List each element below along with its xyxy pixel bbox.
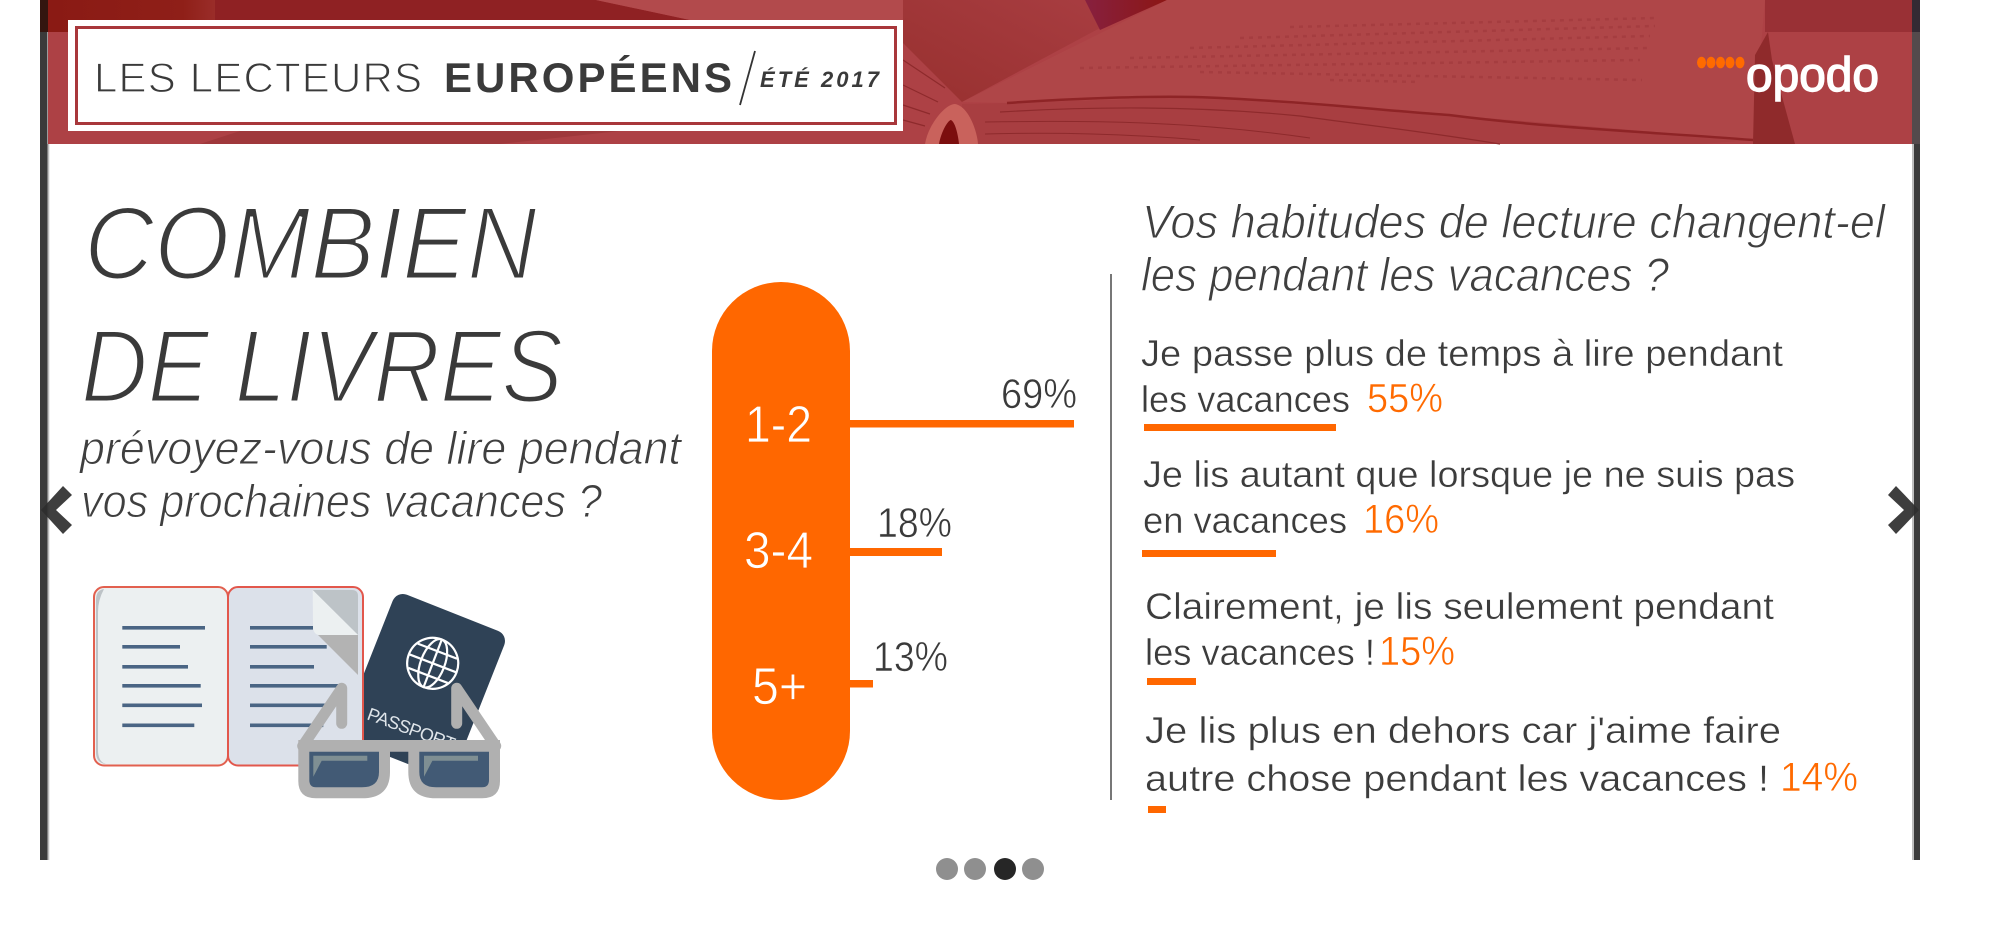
heading: reading habits question: Vos habitudes de lecture changent-el (1142, 195, 1886, 248)
answer: 14% (1145, 710, 1858, 813)
answer: 15%: les vacances ! (1145, 632, 1375, 673)
title box (68, 20, 903, 131)
logo: opodo: opodo (1746, 49, 1879, 102)
icon: book, passport and glasses (94, 587, 508, 798)
bar: 5+ (752, 633, 948, 716)
slash divider (740, 51, 755, 105)
bar: 3-4: 3-4 (744, 522, 813, 580)
bar: 1-2 (745, 370, 1077, 454)
bar: 1-2: 69% (1001, 370, 1077, 417)
bar: 1-2: 1-2 (745, 396, 812, 454)
arrow: previous (41, 486, 72, 534)
heading: reading habits question: les pendant les vacances ? (1141, 248, 1669, 301)
icon: passport: PASSPORT (365, 704, 458, 754)
heading: combien de livres: DE LIVRES (81, 309, 563, 425)
answer: 14%: 14% (1780, 754, 1858, 800)
answer: 55% (1141, 333, 1784, 431)
answer: 55%: Je passe plus de temps à lire pendant (1141, 333, 1784, 374)
chart: number of books (712, 282, 1077, 800)
answer: 15% (1145, 586, 1775, 685)
answer: 14%: Je lis plus en dehors car j'aime faire (1145, 710, 1781, 751)
answer: 15%: Clairement, je lis seulement pendant (1145, 586, 1775, 627)
heading: combien de livres: COMBIEN (84, 186, 538, 302)
subheading: question: vos prochaines vacances ? (81, 475, 602, 527)
heading: reading habits question (1141, 195, 1886, 301)
bar: 3-4: 18% (877, 499, 952, 546)
subheading: question: prévoyez-vous de lire pendant (78, 422, 683, 474)
answer: 15%: 15% (1379, 628, 1455, 674)
answer: 55%: les vacances (1141, 379, 1350, 420)
heading: combien de livres (81, 186, 563, 425)
answer: 55%: 55% (1367, 375, 1443, 421)
carousel pagination dots (936, 858, 1044, 880)
arrow: next (1888, 486, 1919, 534)
header banner (48, 0, 1912, 144)
subheading: question (78, 422, 683, 527)
icon: open book (94, 587, 363, 766)
bar: 5+: 13% (873, 633, 948, 680)
title: européens: EUROPÉENS (444, 54, 732, 101)
answer: 16%: 16% (1363, 496, 1439, 542)
icon: glasses (298, 688, 500, 798)
icon: passport (339, 591, 508, 781)
title: les lecteurs: LES LECTEURS (94, 54, 422, 101)
answer: 16% (1142, 454, 1795, 557)
date: ÉTÉ 2017 (760, 67, 881, 92)
answer: 16%: Je lis autant que lorsque je ne suis pas (1143, 454, 1795, 495)
answer: 16%: en vacances (1143, 500, 1347, 541)
answer: 14%: autre chose pendant les vacances ! (1145, 758, 1769, 799)
bar: 5+: 5+ (752, 658, 807, 716)
orange pill (712, 282, 850, 800)
bar: 3-4 (744, 499, 952, 580)
